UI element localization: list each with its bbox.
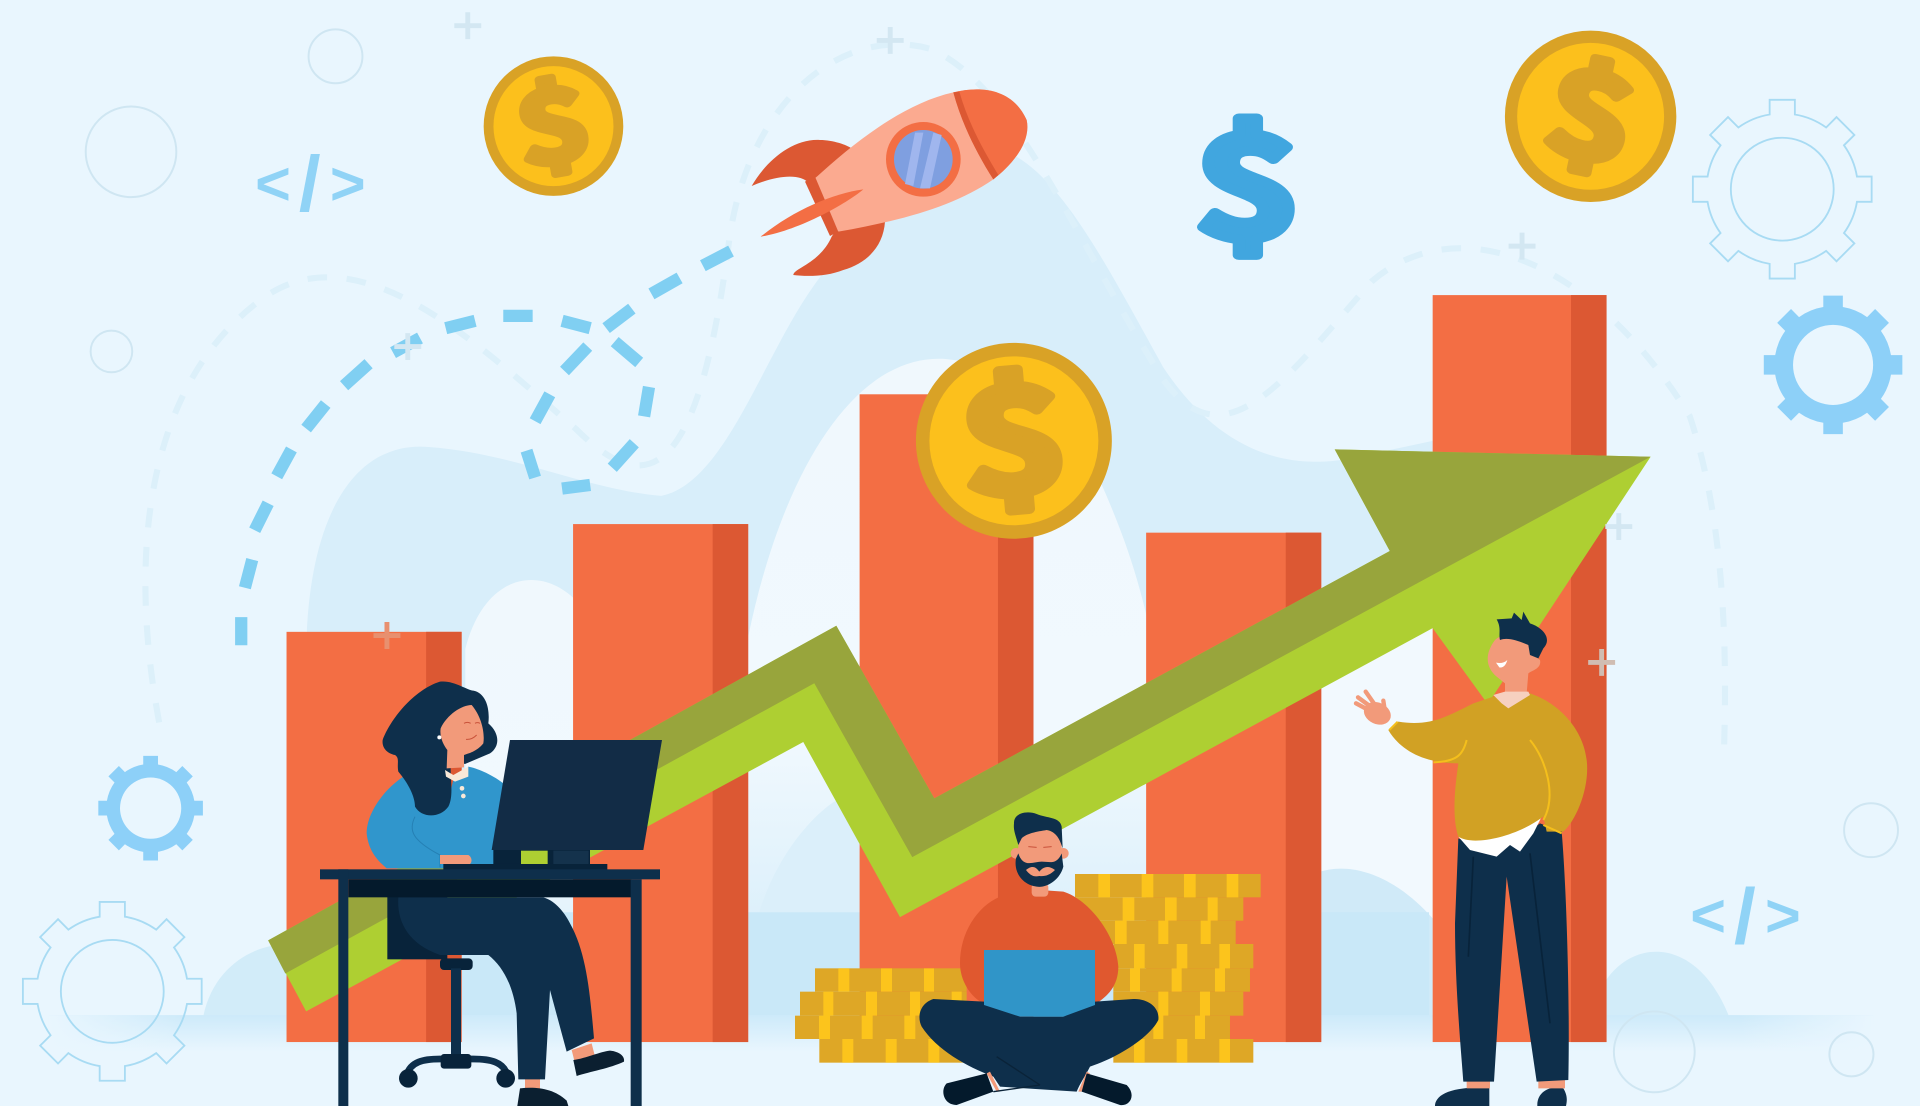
coin: top left [484, 43, 623, 196]
coin: top right [1505, 16, 1676, 202]
trousers [1455, 823, 1569, 1082]
crossed legs [919, 999, 1158, 1105]
blue shirt [367, 767, 503, 868]
ankles [1467, 1080, 1565, 1088]
gear: outline top right [1693, 100, 1872, 279]
person: woman at desk [320, 681, 662, 1106]
decorative plus signs [373, 12, 1632, 676]
icon: blue dollar sign: $ [1195, 74, 1301, 278]
arrow: rising green trend [268, 449, 1651, 1011]
collar [1493, 692, 1530, 708]
code symbol: left: / [299, 140, 321, 228]
head and beard [1011, 812, 1069, 887]
face and collar [437, 705, 484, 798]
code symbol: left: > [330, 149, 366, 217]
desk [320, 869, 660, 1106]
shoes [1435, 1087, 1567, 1106]
sweater [1388, 693, 1587, 841]
coin: top right: $ [1532, 16, 1652, 200]
person: man sitting with laptop [919, 812, 1158, 1105]
coin: centre [916, 321, 1112, 539]
decorative dashed paths [145, 44, 1725, 747]
chart: orange bars [287, 295, 1607, 1042]
hands on keyboard [440, 855, 472, 864]
rocket [752, 89, 1027, 276]
sweater [960, 858, 1118, 1003]
trouser pleats [1468, 853, 1550, 1023]
leg and shoes [398, 897, 624, 1106]
arm crease [412, 817, 440, 867]
head [1488, 612, 1547, 697]
background hills [49, 147, 1873, 1052]
code symbol: right: > [1765, 882, 1801, 950]
gear: outline bottom left [23, 902, 202, 1081]
gear: solid right [1764, 296, 1902, 434]
person: man standing and gesturing [1356, 612, 1587, 1106]
code symbol: right: < [1690, 882, 1726, 950]
neck [1032, 883, 1048, 897]
coin: centre: $ [951, 321, 1075, 539]
hair [383, 681, 497, 815]
code symbol: left: < [255, 149, 291, 217]
coin stacks [795, 874, 1261, 1063]
laptop [984, 950, 1095, 1017]
shirt tail [1458, 817, 1542, 857]
chair [387, 893, 515, 1088]
monitor [443, 740, 662, 870]
code symbol: right: / [1734, 872, 1756, 960]
sweater highlights [1389, 722, 1562, 833]
dashed rocket trail [241, 251, 731, 645]
gear: solid left [98, 756, 203, 860]
coin: top left: $ [504, 43, 601, 196]
hand [1356, 692, 1395, 729]
